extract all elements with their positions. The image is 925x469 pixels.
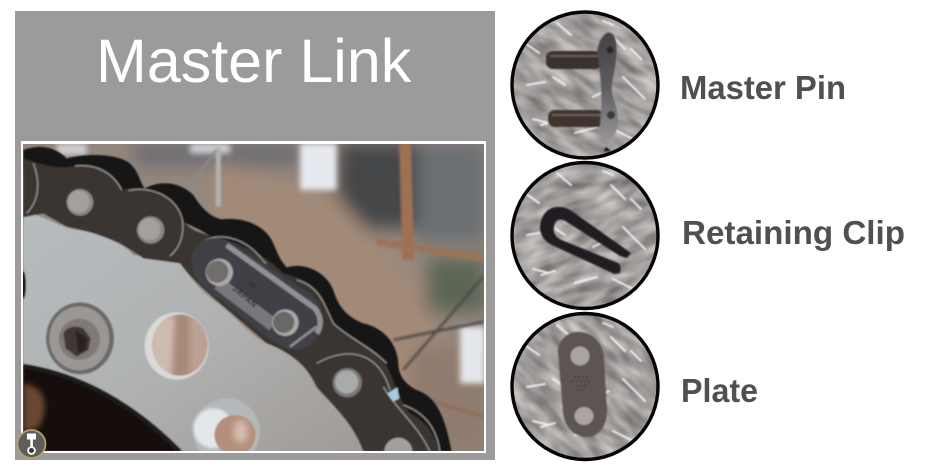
plate part: [558, 332, 607, 437]
bolt: [46, 302, 114, 374]
panel: master link: [15, 11, 495, 465]
circle: plate: [510, 312, 660, 462]
sprocket hole: [145, 312, 210, 380]
chain outer links: [23, 158, 440, 452]
blurred background: [133, 144, 484, 446]
stamped text on link: JAPAN: [230, 283, 259, 310]
chain pins: [67, 189, 412, 452]
retaining clip part: [540, 207, 631, 274]
label: master pin: Master Pin: [680, 69, 846, 106]
master link plate: [192, 238, 322, 350]
photo: chain and sprocket: [21, 141, 486, 465]
label: retaining clip: Retaining Clip: [682, 214, 905, 251]
icon: piston badge: [18, 430, 46, 458]
master pin part: [546, 33, 618, 151]
label: plate: Plate: [681, 372, 758, 409]
circle: retaining clip: [510, 161, 660, 311]
lower bolt: [192, 398, 260, 451]
title: Master Link: [96, 27, 412, 95]
circle: master pin: [510, 10, 660, 160]
master link plate: UI: [246, 279, 258, 290]
rear chain rollers: [23, 147, 452, 452]
sprocket plate: [23, 213, 365, 452]
dark hub opening: [23, 365, 180, 452]
